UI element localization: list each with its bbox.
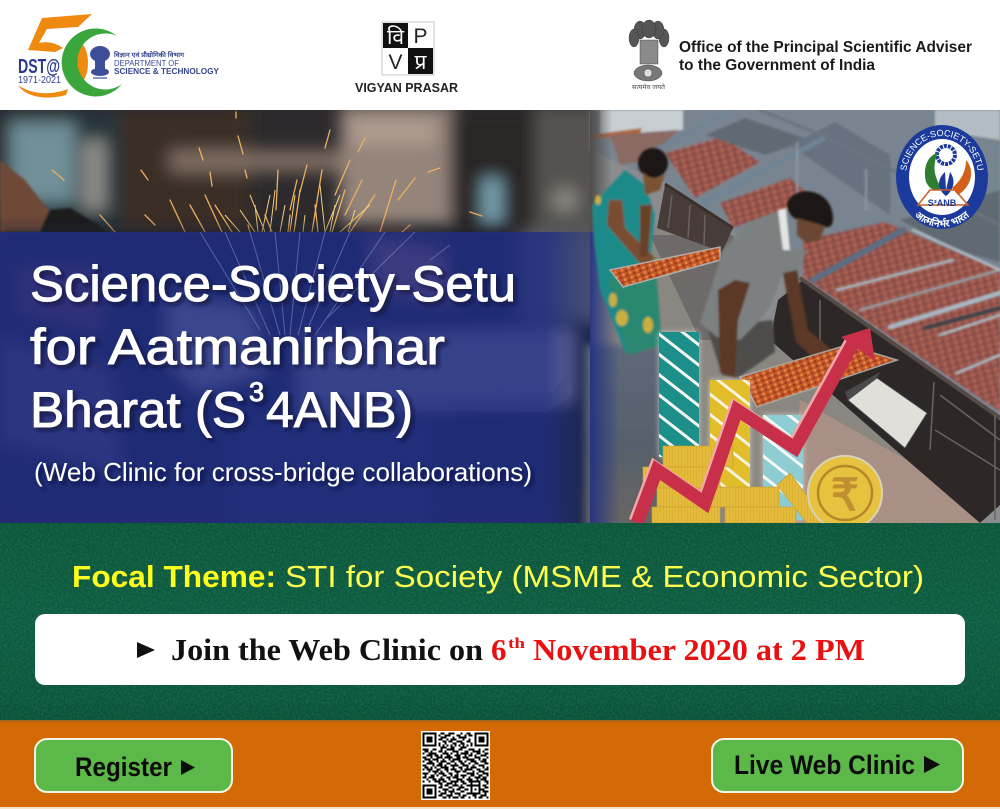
blue fade at left of right photo [590,232,620,523]
logo: DST 50 years [18,14,219,98]
hero photo band [0,105,1000,530]
logo: Office of the PSA: Office of the Principal Scientific Adviser [679,39,972,56]
logo: DST 50 years: DEPARTMENT OF [114,58,179,68]
logo: Vigyan Prasar: V [388,51,403,74]
date banner: Join the Web Clinic on [171,632,483,667]
man worker [700,191,833,378]
photo: solar dryer with workers [585,110,1000,530]
arm and glove [0,160,50,232]
logo: Science-Society-Setu badge [896,125,988,229]
focal theme heading: STI for Society (MSME & Economic Sector) [285,559,924,594]
arrow: rising growth [636,328,875,523]
logo: Science-Society-Setu badge: SCIENCE-SOCIETY-SETU [900,130,984,170]
icon: national emblem blue [90,46,110,79]
floor shadow left [585,345,665,530]
logo: Vigyan Prasar [355,22,458,95]
logo: Science-Society-Setu badge: आत्मनिर्भर भारत [916,210,970,228]
icon: rupee coin: ₹ [831,471,859,520]
title [30,256,516,438]
bar: teal striped [659,332,699,457]
focal theme heading: Focal Theme: [72,559,276,594]
date banner: th [508,636,526,652]
logo: Vigyan Prasar: VIGYAN PRASAR [355,81,458,95]
chili panes [665,137,760,198]
logo: DST 50 years: 1971-2021 [18,75,61,86]
blue translucent panel [0,232,620,523]
man's tray [740,345,897,407]
date banner: November 2020 at 2 PM [533,632,865,667]
dryer cabinet [770,280,1000,523]
logo: Office of the PSA: to the Government of India [679,57,875,74]
subtitle: (Web Clinic for cross-bridge collaborations) [34,457,532,487]
floor [604,228,906,523]
frame bars [655,110,1000,373]
woman's tray [610,247,720,287]
logo: Vigyan Prasar: वि [387,25,404,49]
title: Science-Society-Setu [30,256,516,312]
roof glass background [590,110,1000,420]
woman worker [592,148,668,355]
panel: focal theme green band [0,523,1000,721]
icon: rupee coin [808,456,882,530]
title: 3 [249,377,264,407]
faint sparks on panel [200,232,450,335]
bar: light blue striped [763,415,803,520]
logo: Vigyan Prasar: प्र [415,51,428,74]
photo: metal grinding workshop [0,105,620,523]
icon: national emblem [629,20,669,81]
date banner [35,614,965,685]
title: Bharat (S [30,382,246,438]
button: register: Register [75,752,172,782]
date banner: 6 [491,632,506,667]
bar: yellow striped [710,380,750,487]
icon: gold coin stacks [643,446,827,523]
panel: orange footer [0,720,1000,809]
button: live web clinic: Live Web Clinic [734,750,915,780]
logo: Office of the PSA [629,20,972,91]
button: live web clinic [712,739,963,792]
qr code [421,731,490,800]
open drawer panel [848,378,927,448]
logo: Vigyan Prasar: P [413,25,428,48]
button: register [35,739,232,792]
cabinet front detail [668,195,1000,520]
title: 4ANB) [266,382,413,438]
glass highlights [705,118,810,155]
logo: DST 50 years: DST@ [18,56,60,78]
logo: DST 50 years: विज्ञान एवं प्रौद्योगिकी विभाग [113,51,184,59]
header band [0,0,1000,110]
sparks above panel [52,112,482,232]
figures [925,153,942,190]
soft seam with workshop photo [590,110,612,232]
logo: DST 50 years: SCIENCE & TECHNOLOGY [114,66,219,76]
gear [937,146,955,164]
title: for Aatmanirbhar [30,319,445,375]
scene under blue panel [0,230,620,523]
logo: Office of the PSA: सत्यमेव जयते [632,83,666,91]
logo: Science-Society-Setu badge: S³ANB [928,198,957,208]
